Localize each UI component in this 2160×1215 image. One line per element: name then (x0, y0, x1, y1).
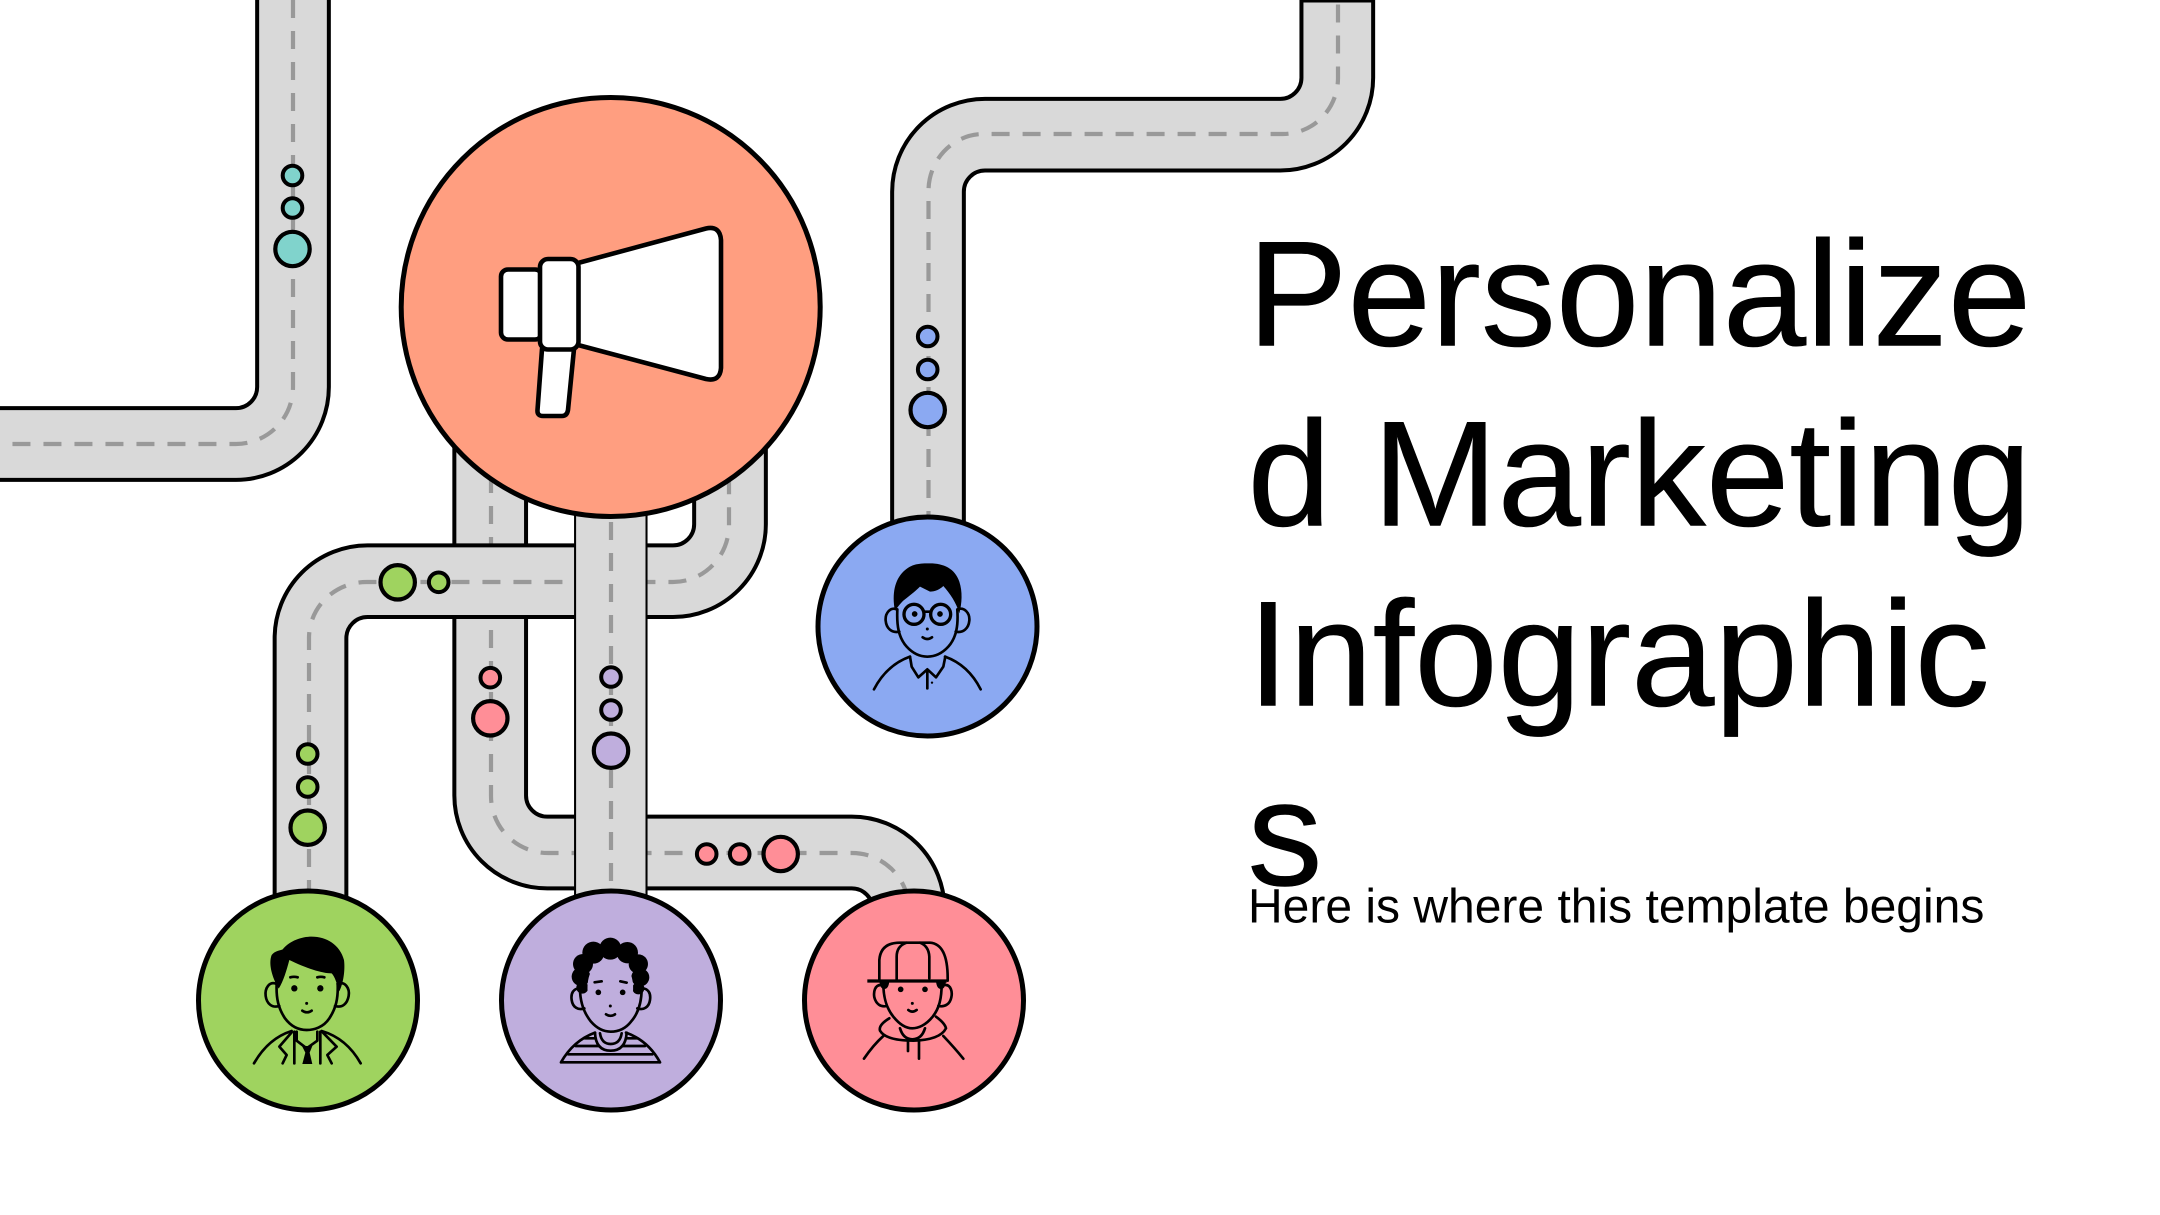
green waypoint dots (290, 565, 449, 845)
road: teal route top left (0, 0, 293, 444)
pink waypoint dots (473, 668, 798, 871)
avatar: purple person curly hair (502, 891, 720, 1110)
subtitle: Here is where this template begins (1248, 880, 1984, 934)
title: Personalize (1248, 210, 2031, 378)
road: green route to green avatar (309, 400, 730, 1000)
road: blue route top right (928, 0, 1338, 630)
teal waypoint dots (275, 166, 310, 266)
main orange circle with megaphone (401, 98, 820, 516)
avatar: pink person with cap (804, 891, 1024, 1110)
road: pink route to pink avatar (490, 382, 909, 1000)
title: s (1248, 749, 1322, 917)
blue waypoint dots (910, 327, 945, 427)
icon: megaphone (501, 228, 721, 416)
avatar: blue person with glasses (818, 517, 1037, 736)
road: purple straight route (574, 398, 648, 1000)
title: d Marketing (1248, 390, 2031, 558)
purple waypoint dots (594, 667, 628, 768)
avatar: green person in suit (198, 891, 418, 1110)
title: Infographic (1248, 570, 1990, 738)
